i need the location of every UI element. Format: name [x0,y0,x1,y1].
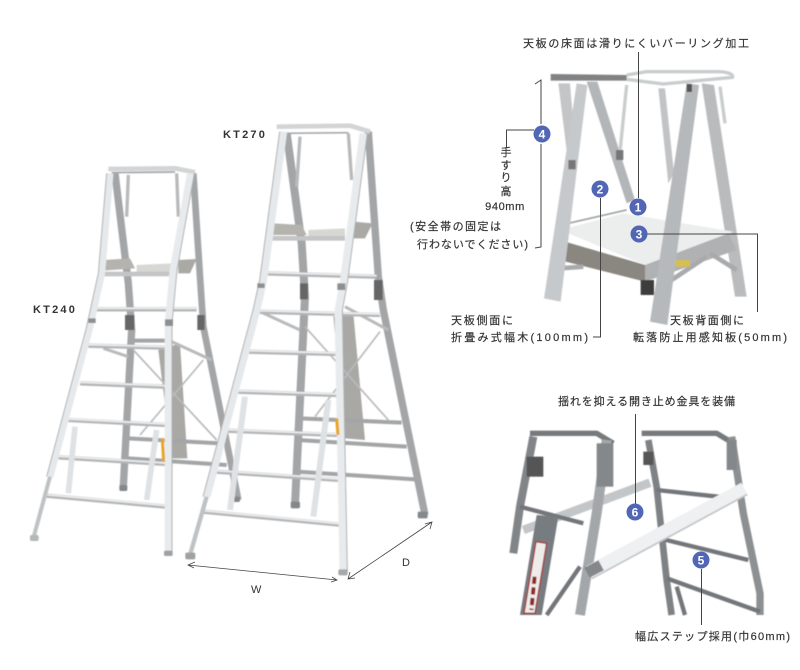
heading: callout 1: 天板の床面は滑りにくいバーリング加工 [523,36,749,50]
text block: toe board: 折畳み式幅木(100mm) [451,330,588,344]
dimension arrow: D: D [402,557,410,569]
text block: handrail height: 手 [500,145,512,159]
leader lines [506,52,758,625]
marker 3 [630,226,648,242]
text block: harness note [410,219,528,251]
marker 5 [692,552,710,568]
marker 6 [626,504,644,520]
marker 6: 6 [632,506,639,520]
text block: toe board: 天板側面に [451,313,513,327]
text block: handrail height: 940mm [485,201,525,213]
text block: wide step: 幅広ステップ採用(巾60mm) [635,629,790,643]
dimension arrow: W: W [251,584,262,596]
text block: detection plate: 天板背面側に [670,313,744,327]
text block: handrail height: り [500,171,512,184]
photo: opening stopper and step detail [513,433,760,615]
text block: toe board [451,313,588,344]
ladder photo: KT240 [30,168,240,556]
marker 4 [534,126,550,142]
dimension arrow: W [188,562,337,596]
label: KT240: KT240 [33,304,77,316]
ladder photo: KT270 [185,126,428,575]
marker 5: 5 [698,554,705,568]
marker 2: 2 [597,182,604,196]
marker 4: 4 [539,128,546,142]
text block: handrail height: 高 [500,184,512,198]
marker 3: 3 [636,228,643,242]
text block: detection plate [633,313,787,344]
text block: harness note: (安全帯の固定は [410,219,501,233]
text block: handrail height: す [500,159,512,172]
label: KT270: KT270 [223,129,267,141]
photo: platform and handrail detail [544,72,747,325]
heading: opening stopper: 揺れを抑える開き止め金具を装備 [558,394,735,408]
marker 2 [592,180,608,198]
text block: detection plate: 転落防止用感知板(50mm) [633,330,787,344]
marker 1 [630,198,646,216]
text block: handrail height [485,145,525,213]
text block: harness note: 行わないでください) [417,238,528,251]
marker 1: 1 [635,200,642,214]
dimension arrow: D [348,522,432,579]
